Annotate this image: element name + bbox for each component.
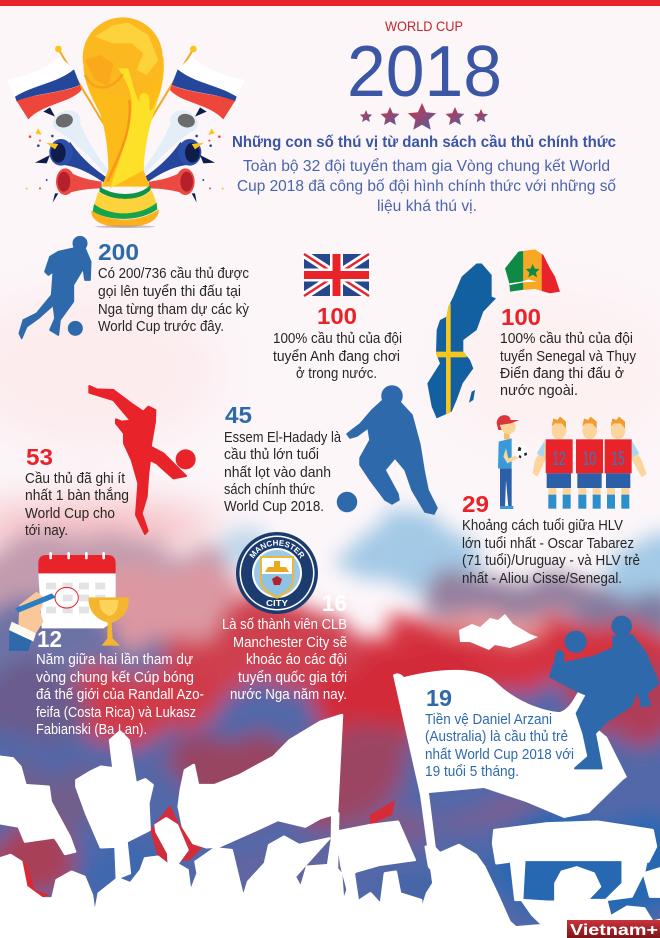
icon: world cup trophy with flags and horns (7, 17, 245, 228)
description: sách chính thức (224, 482, 315, 498)
description: vòng chung kết Cúp bóng (36, 670, 194, 686)
number: 29 (462, 491, 489, 517)
subtitle: Những con số thú vị từ danh sách cầu thủ chính thức (232, 134, 616, 151)
number: 100 (501, 304, 541, 330)
icon: Manchester City badge: CITY (266, 599, 289, 608)
left horns (49, 107, 109, 195)
description: nhất 1 bàn thắng (25, 487, 129, 504)
watercolor background (0, 290, 660, 938)
player 15 (605, 417, 647, 509)
description: nhất lọt vào danh (224, 465, 331, 481)
description: gọi lên tuyển thi đấu tại (98, 284, 241, 300)
right flag (148, 46, 245, 123)
left raised hand (0, 757, 75, 854)
white paint splash (459, 614, 538, 650)
raised arm (156, 818, 187, 890)
icon: red player kicking (89, 386, 195, 534)
banner arms (511, 862, 660, 900)
icon: Senegal map (505, 249, 560, 294)
description: nước Nga năm nay. (230, 687, 347, 703)
description (224, 430, 342, 515)
description (273, 331, 402, 382)
panel: 45 oldest player (224, 386, 437, 515)
coach (497, 415, 528, 509)
description: Essem El-Hadady là (224, 430, 342, 446)
description: (71 tuổi)/Uruguay - và HLV trẻ (462, 553, 640, 569)
main title: 2018 (347, 32, 502, 112)
description: khoác áo các đội (246, 652, 347, 668)
stars (360, 103, 488, 130)
number: 19 (426, 685, 452, 711)
panel: 29 coach age gap (462, 415, 647, 587)
player 12: 12 (552, 449, 566, 470)
description: nhất World Cup 2018 với (425, 747, 574, 763)
right horns (142, 107, 201, 195)
globe (83, 17, 163, 97)
description: Là số thành viên CLB (222, 617, 347, 633)
description: Manchester City sẽ (233, 635, 347, 651)
heading block (232, 18, 616, 215)
panel: England 100 (273, 254, 402, 382)
player 10 (576, 417, 603, 509)
description: Có 200/736 cầu thủ được (98, 266, 249, 282)
panel: 200 players (19, 237, 250, 338)
description: World Cup 2018. (224, 499, 324, 515)
icon: Manchester City badge (236, 532, 318, 614)
description: lớn tuổi nhất - Oscar Tabarez (462, 536, 634, 552)
description (462, 518, 640, 587)
description: 19 tuổi 5 tháng. (425, 764, 519, 780)
description: đá thế giới của Randall Azo- (36, 687, 204, 703)
description (25, 471, 129, 539)
panel: Senegal and Sweden 100 (427, 249, 636, 418)
white crowd silhouette (0, 715, 660, 938)
player 12 (533, 417, 573, 509)
description (425, 712, 574, 780)
shield (260, 556, 294, 599)
icon: blue player with ball (338, 386, 437, 514)
panel: 53 goal scorers (25, 386, 195, 539)
description: Năm giữa hai lần tham dự (36, 652, 193, 668)
flag pole (332, 813, 338, 872)
base (99, 185, 151, 199)
intro text (237, 157, 616, 215)
panel: 19 youngest player (425, 617, 658, 780)
icon: blue player (19, 237, 91, 338)
description: tuyển Senegal và Thụy (500, 349, 637, 365)
icon: blue player juggling (550, 617, 658, 768)
icon: coach and three players (497, 415, 647, 509)
calendar (38, 552, 116, 628)
continents (95, 23, 158, 75)
cup body (83, 57, 164, 187)
description: World Cup cho (25, 506, 115, 522)
eyebrow: WORLD CUP (385, 18, 463, 34)
top red bar (0, 0, 660, 6)
number: 45 (225, 402, 252, 428)
player 15: 15 (611, 449, 625, 470)
small flag (337, 822, 415, 903)
description: tuyển Anh đang chơi (273, 349, 400, 365)
megaphone (179, 715, 342, 847)
number: 100 (317, 303, 357, 329)
description: Điển đang thi đấu ở (500, 366, 624, 382)
description: tới nay. (25, 523, 68, 539)
description: Tiền vệ Daniel Arzani (425, 712, 552, 728)
intro text: Cup 2018 đã công bố đội hình chính thức với những số (237, 178, 616, 195)
icon: calendar, hand and trophy (9, 552, 129, 651)
pointing hand (77, 732, 152, 878)
player 10: 10 (583, 449, 596, 470)
description: tuyển quốc gia tới (238, 670, 347, 686)
white waving flag (393, 670, 627, 897)
description: nhất - Aliou Cisse/Senegal. (462, 571, 622, 587)
confetti (26, 107, 224, 203)
intro text: liệu khá thú vị. (377, 198, 477, 215)
description: feifa (Costa Rica) và Lukasz (36, 705, 196, 721)
description (98, 266, 250, 335)
left flag (7, 46, 103, 123)
description: 100% cầu thủ của đội (273, 331, 402, 347)
description (500, 331, 637, 399)
description: Nga từng tham dự các kỳ (98, 302, 250, 318)
description (36, 652, 204, 738)
number: 16 (322, 590, 347, 616)
description: 100% cầu thủ của đội (500, 331, 633, 347)
winged figure (110, 57, 164, 188)
number: 200 (98, 239, 139, 265)
description: Cầu thủ đã ghi ít (25, 471, 125, 487)
number: 53 (26, 444, 53, 470)
vivid red splashes (20, 800, 395, 900)
small gold trophy (89, 597, 129, 646)
number: 12 (37, 626, 62, 652)
description: Khoảng cách tuổi giữa HLV (462, 518, 623, 534)
description: cầu thủ lớn tuổi (224, 447, 319, 463)
panel: 12 years between tournaments (9, 552, 204, 738)
logo: Vietnam+ (567, 920, 660, 938)
hand with pen (9, 592, 56, 651)
ring text: MANCHESTER (249, 540, 304, 559)
intro text: Toàn bộ 32 đội tuyển tham gia Vòng chung kết World (243, 157, 610, 175)
icon: Sweden map (427, 263, 496, 418)
description: Fabianski (Ba Lan). (36, 722, 147, 738)
description: ở trong nước. (296, 366, 377, 382)
description: (Australia) là cầu thủ trẻ (425, 729, 568, 745)
description: World Cup trước đây. (98, 319, 224, 335)
panel: 16 Manchester City players (222, 532, 347, 703)
description: nước ngoài. (500, 383, 578, 399)
icon: UK flag (304, 254, 369, 296)
banner (493, 822, 656, 863)
description (222, 617, 347, 703)
